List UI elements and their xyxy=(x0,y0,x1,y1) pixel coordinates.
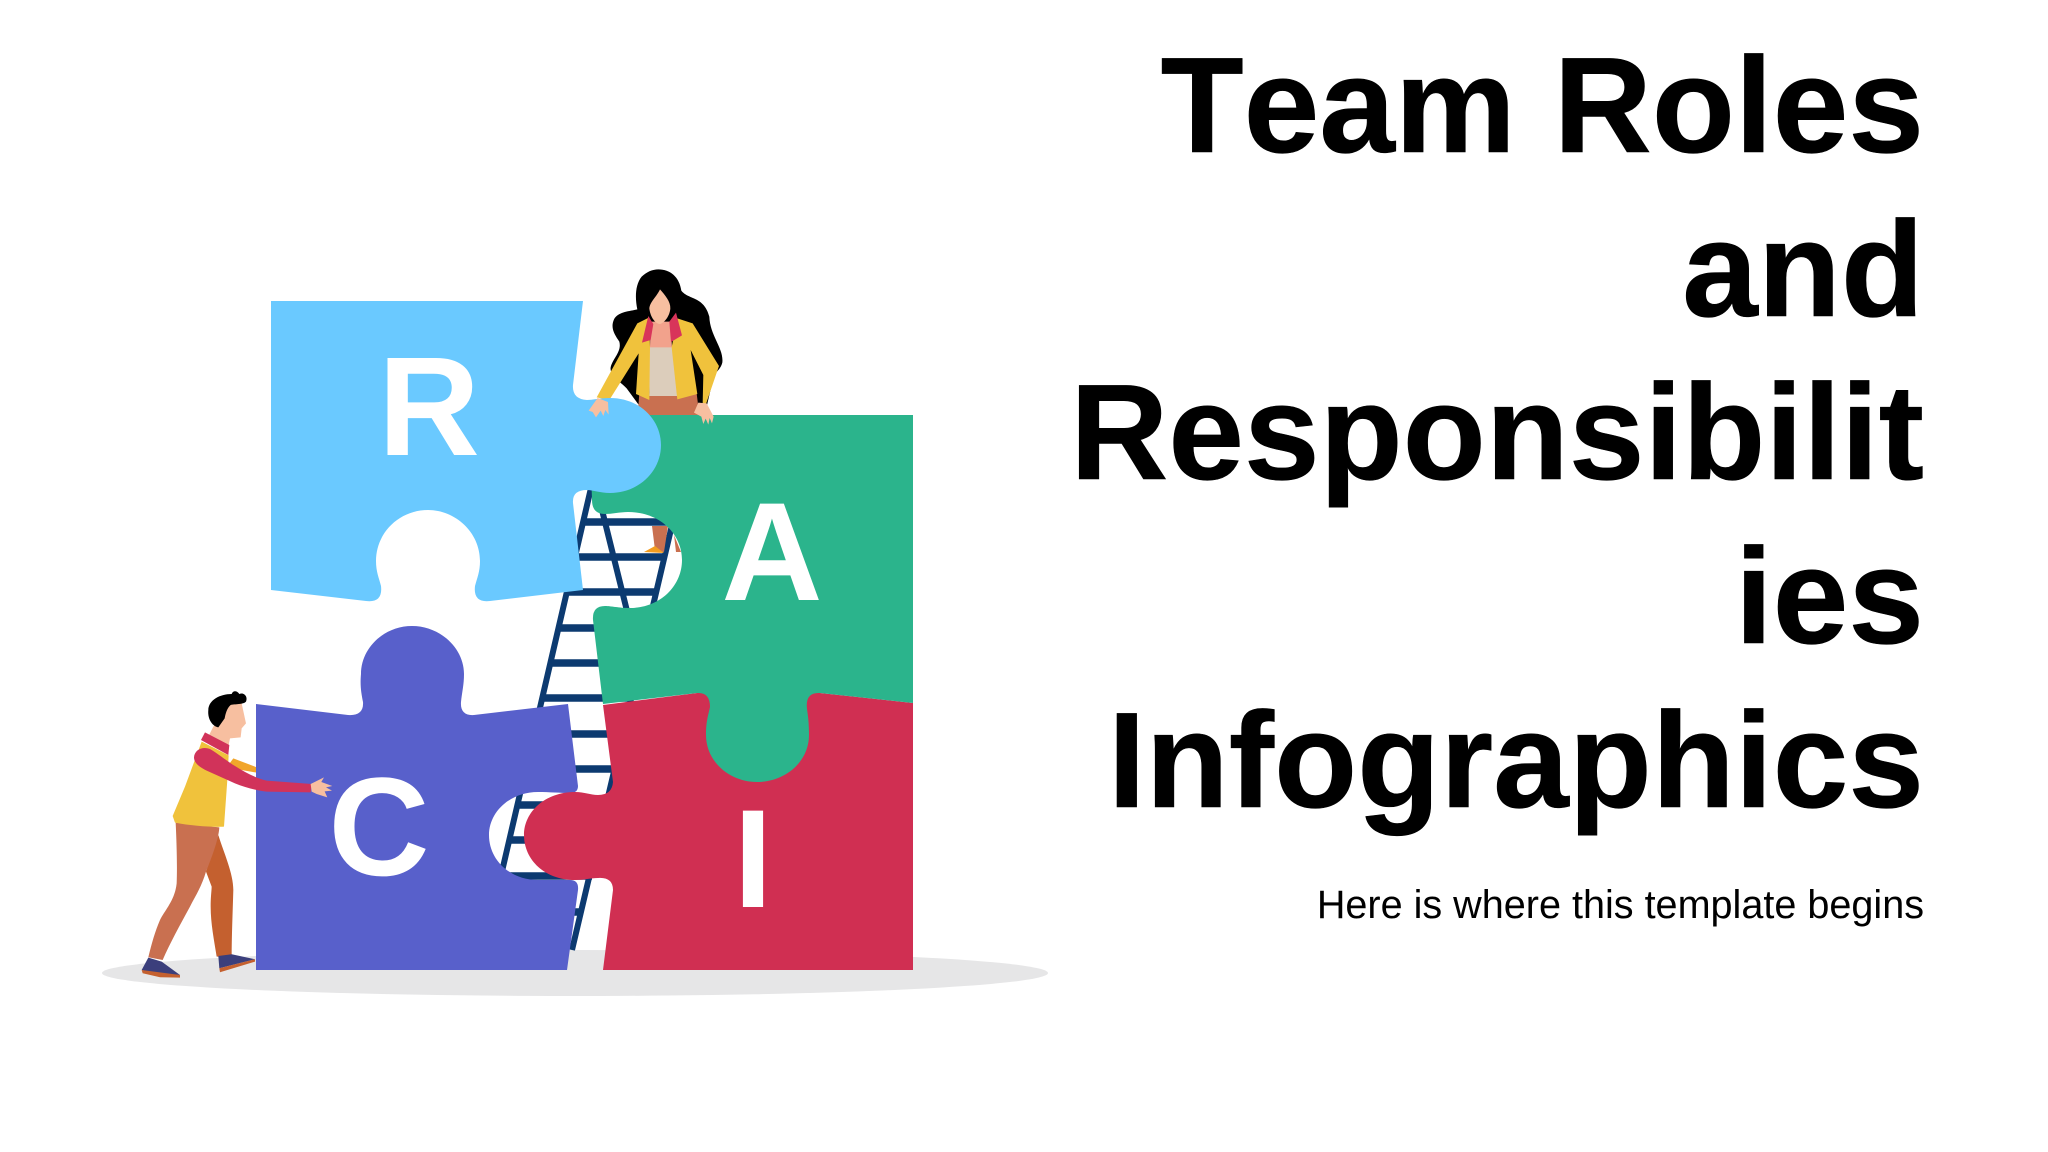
puzzle piece A xyxy=(590,415,913,782)
puzzle piece R xyxy=(271,301,661,601)
puzzle piece C xyxy=(256,626,578,970)
title: Team Roles xyxy=(1161,29,1924,181)
subtitle: Here is where this template begins xyxy=(1317,883,1924,927)
title xyxy=(1070,29,1924,836)
man pushing puzzle piece xyxy=(142,691,257,978)
woman's left hand on puzzle xyxy=(589,398,609,417)
title: ies xyxy=(1735,520,1924,672)
man's arm and hand xyxy=(194,748,332,797)
legs of figure on the ladder xyxy=(644,526,681,553)
title: Infographics xyxy=(1108,684,1924,836)
woman's right hand on puzzle xyxy=(694,403,714,425)
puzzle piece A: A xyxy=(721,473,823,630)
puzzle piece C: C xyxy=(328,748,430,905)
title: and xyxy=(1682,193,1924,345)
puzzle piece I: I xyxy=(734,780,772,937)
ladder xyxy=(495,488,681,950)
woman standing on ladder xyxy=(597,269,722,420)
puzzle piece I xyxy=(524,693,913,970)
puzzle piece R: R xyxy=(378,327,480,485)
ground shadow xyxy=(102,950,1048,996)
title: Responsibilit xyxy=(1070,356,1924,508)
